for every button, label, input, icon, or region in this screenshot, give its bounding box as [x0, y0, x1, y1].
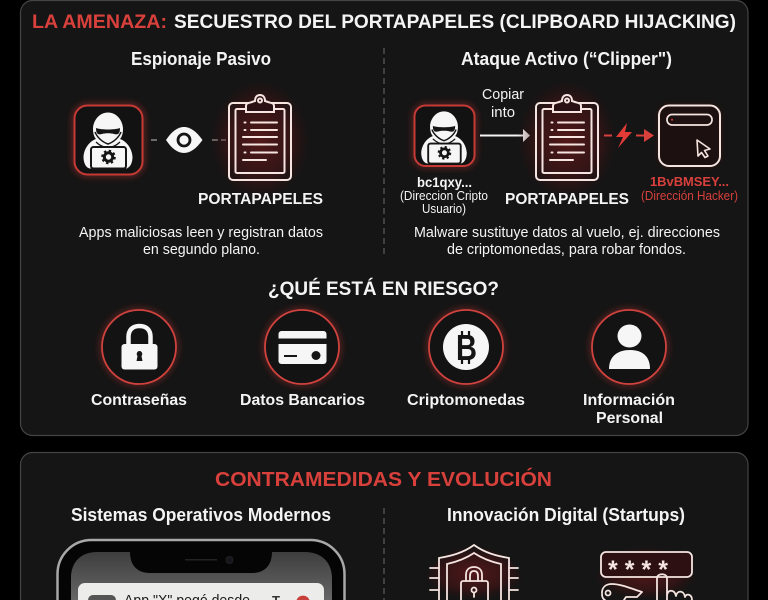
text: passive description: Apps maliciosas leen y registran datos: [79, 224, 323, 241]
label: user address: (Direccion Cripto: [400, 189, 488, 203]
arrow: red bolt swap: [604, 123, 654, 148]
icon: hacker in glowing box: [74, 106, 142, 174]
icon: password and key: ****: [608, 556, 668, 584]
heading: innovacion digital: Innovación Digital (Startups): [447, 505, 685, 525]
heading: sistemas operativos: Sistemas Operativos Modernos: [71, 505, 331, 525]
title: la amenaza: SECUESTRO DEL PORTAPAPELES (CLIPBOARD HIJACKING): [174, 12, 736, 33]
label: copiar into: Copiar: [482, 86, 524, 103]
label: Contraseñas: [91, 392, 187, 409]
title: contramedidas y evolucion: CONTRAMEDIDAS Y EVOLUCIÓN: [215, 467, 552, 491]
risk: criptomonedas: [407, 310, 525, 409]
icon: dashed line and eye: [151, 127, 226, 153]
label: portapapeles passive: PORTAPAPELES: [198, 191, 323, 208]
label: hacker address: 1BvBMSEY...: [650, 174, 729, 189]
phone mockup: [58, 540, 344, 600]
label: copiar into: into: [491, 104, 515, 121]
heading: ataque activo: Ataque Activo (“Clipper"): [461, 49, 672, 69]
arrow: copy: [480, 129, 530, 142]
text: active description: de criptomonedas, para robar fondos.: [447, 241, 686, 258]
title: la amenaza: LA AMENAZA:: [32, 12, 167, 33]
text: active description: Malware sustituye datos al vuelo, ej. direcciones: [414, 224, 720, 241]
icon: password and key: [599, 550, 693, 600]
label: portapapeles active: PORTAPAPELES: [505, 191, 629, 208]
label: user address: Usuario): [422, 202, 466, 216]
label: [583, 392, 675, 427]
text: passive description: en segundo plano.: [143, 241, 260, 258]
label: hacker address: [641, 174, 738, 203]
icon: address window: [659, 106, 720, 166]
notification card: [78, 583, 324, 600]
label: Datos Bancarios: [240, 392, 365, 409]
risk: contrasenas: [91, 310, 187, 409]
label: hacker address: (Dirección Hacker): [641, 189, 738, 203]
label: user address: bc1qxy...: [417, 174, 472, 190]
panel: contramedidas: [20, 452, 748, 600]
icon: clipboard passive: [210, 80, 310, 200]
label: user address: [400, 174, 488, 216]
label: copiar into: [482, 86, 524, 121]
icon: shield with lock: [429, 544, 519, 600]
panel: la amenaza: [20, 0, 748, 436]
icon: clipboard active: [517, 80, 617, 200]
heading: que esta en riesgo: ¿QUÉ ESTÁ EN RIESGO?: [268, 278, 499, 300]
risk: datos bancarios: [240, 310, 365, 409]
text: active description: [414, 224, 720, 258]
label: Información: [583, 392, 675, 409]
label: Personal: [596, 410, 663, 427]
icon: hacker active: [414, 106, 474, 166]
risk: informacion personal: [583, 310, 675, 427]
label: Criptomonedas: [407, 392, 525, 409]
risk: criptomonedas: B: [456, 327, 477, 368]
heading: espionaje pasivo: Espionaje Pasivo: [131, 49, 271, 69]
text: passive description: [79, 224, 323, 258]
